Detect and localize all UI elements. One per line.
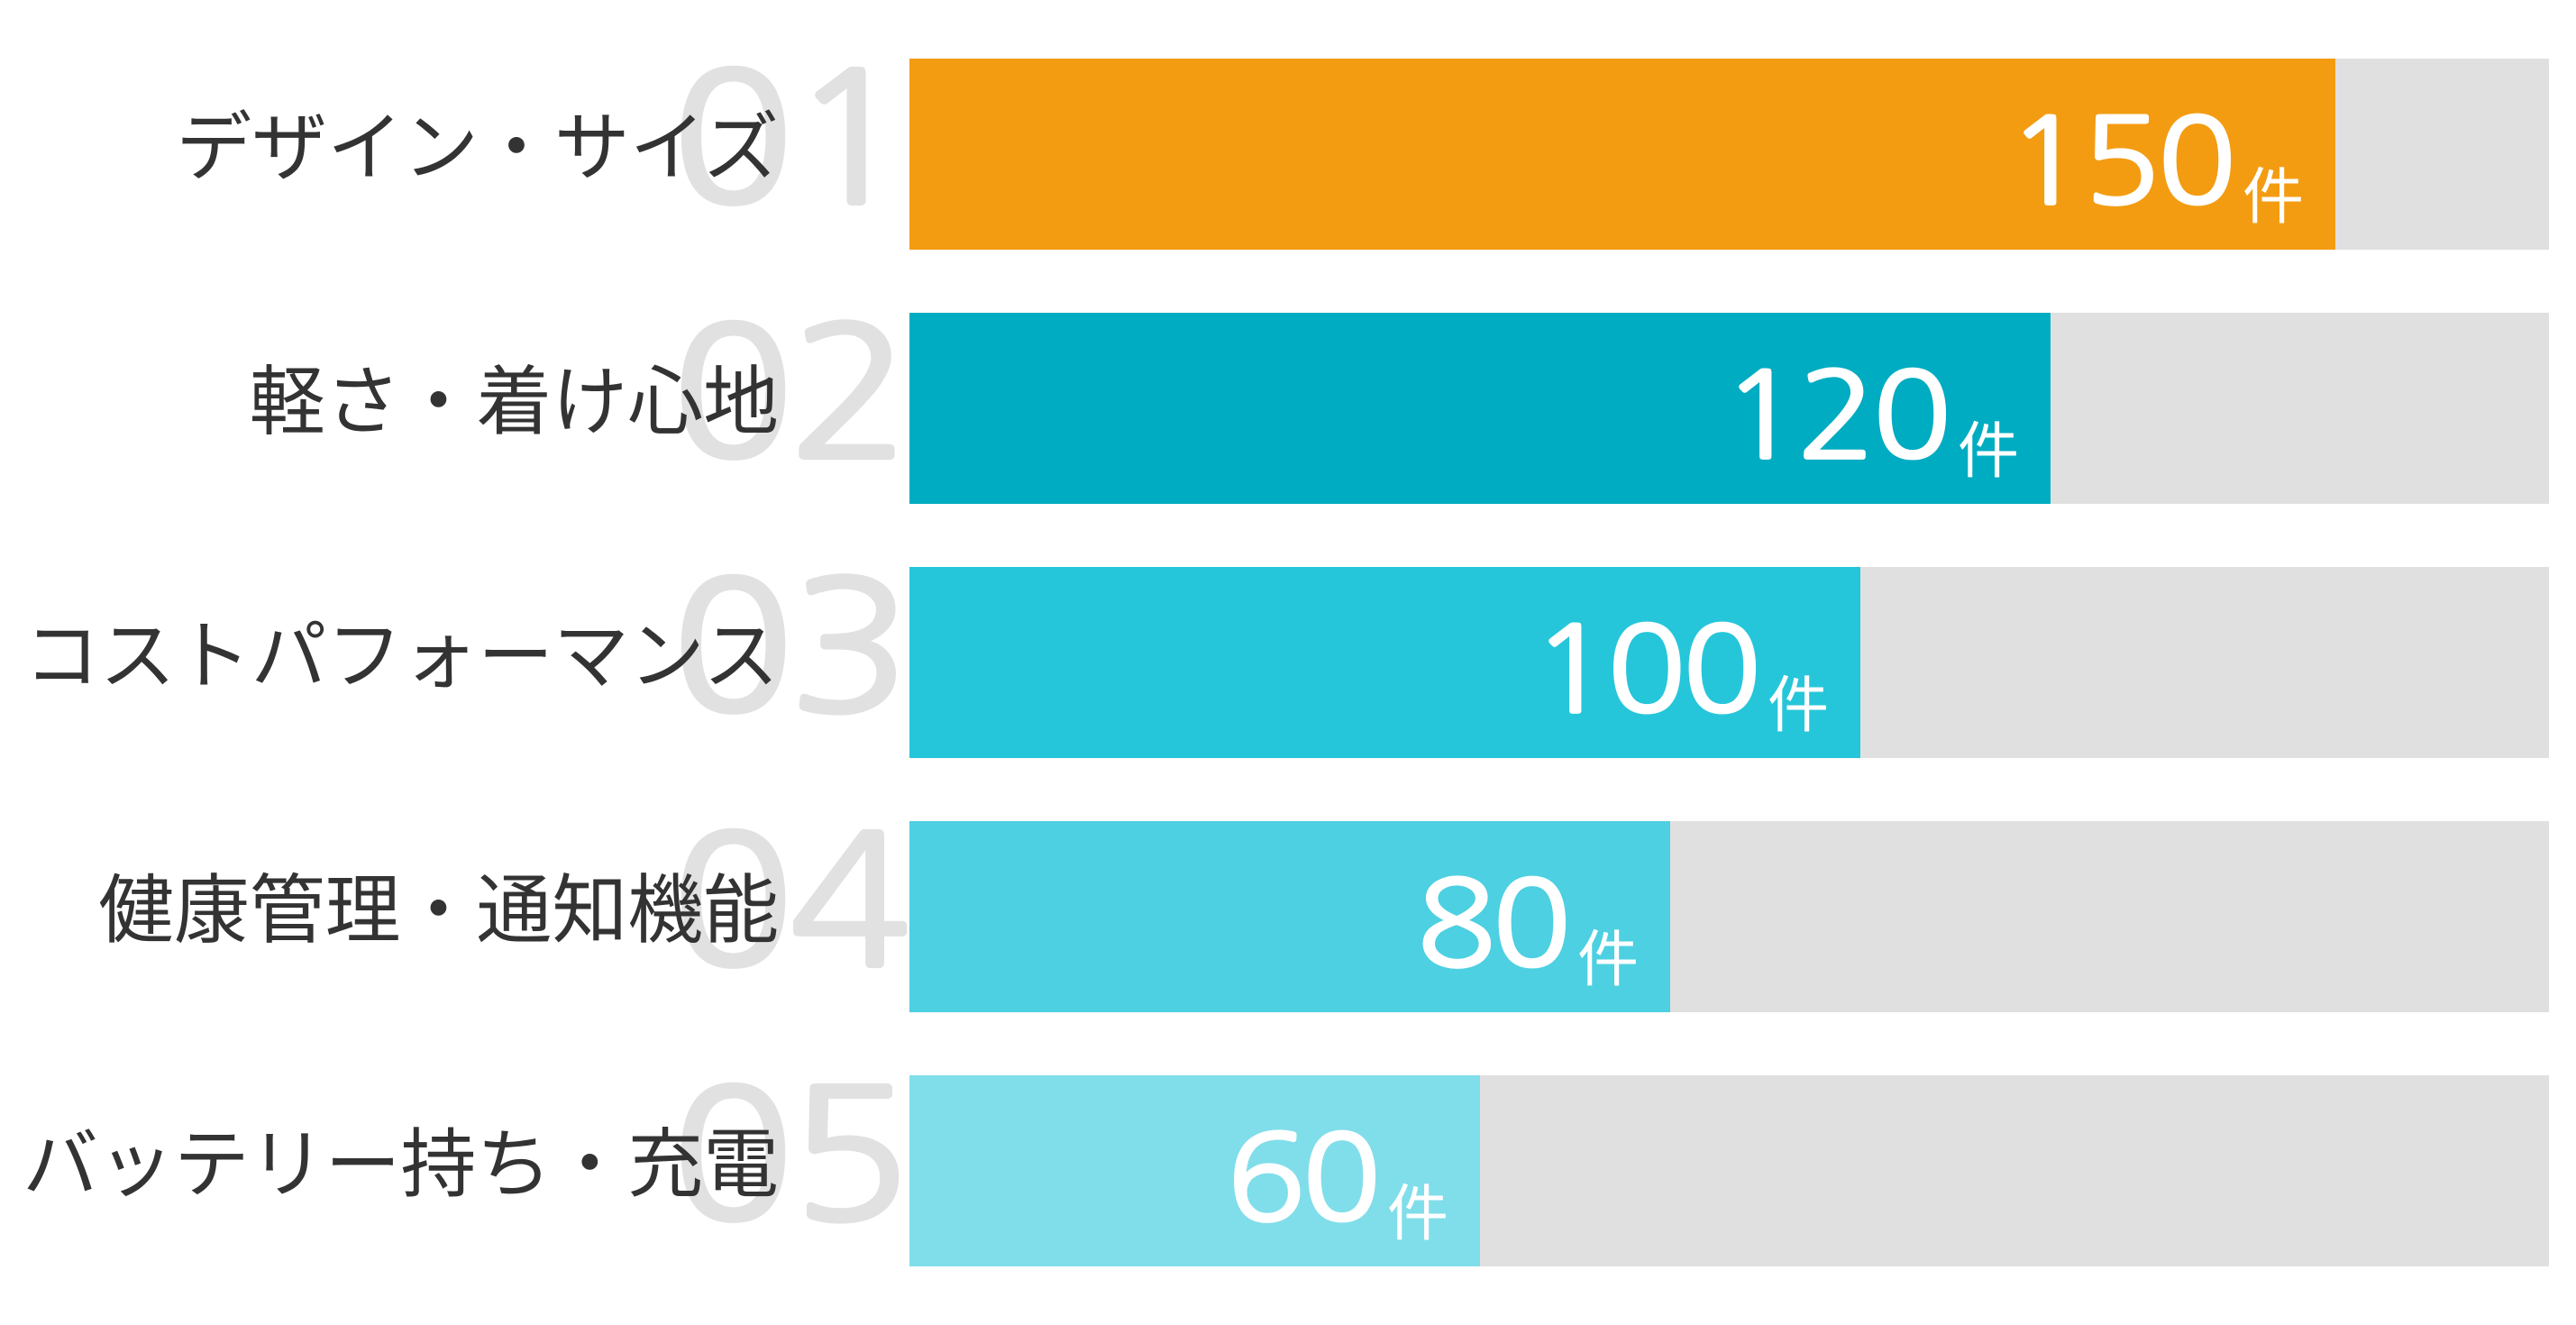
row 03: cost performance: 件: [1768, 655, 1829, 745]
row 05: battery and charging: 60: [1227, 1119, 1377, 1238]
row 03: cost performance: コストパフォーマンス: [24, 614, 779, 699]
row 02: lightness and comfort: 軽さ・着け心地: [250, 360, 779, 444]
row 01: design and size: 件: [2243, 147, 2304, 236]
row 01: design and size: [176, 49, 2549, 250]
row 03: cost performance: 100: [1531, 610, 1758, 729]
row 01: design and size: 150: [2006, 102, 2233, 221]
row 04: health and notifications: [98, 811, 2549, 1012]
row 04: health and notifications: 健康管理・通知機能: [98, 868, 779, 953]
row 04: health and notifications: 件: [1577, 909, 1639, 999]
row 05: battery and charging: 件: [1387, 1164, 1448, 1253]
row 01: design and size: デザイン・サイズ: [176, 105, 779, 190]
row 02: lightness and comfort: 02: [671, 303, 906, 483]
row 02: lightness and comfort: 120: [1722, 356, 1948, 475]
row 02: lightness and comfort: [250, 303, 2549, 504]
row 03: cost performance: 03: [671, 557, 906, 737]
row 05: battery and charging: 05: [671, 1065, 906, 1246]
row 05: battery and charging: バッテリー持ち・充電: [23, 1122, 779, 1207]
row 02: lightness and comfort: 件: [1958, 401, 2019, 490]
row 05: battery and charging: [23, 1065, 2549, 1266]
row 03: cost performance: [24, 557, 2549, 758]
row 04: health and notifications: 80: [1417, 864, 1567, 983]
row 01: design and size: 01: [671, 49, 906, 229]
row 04: health and notifications: 04: [671, 811, 906, 991]
